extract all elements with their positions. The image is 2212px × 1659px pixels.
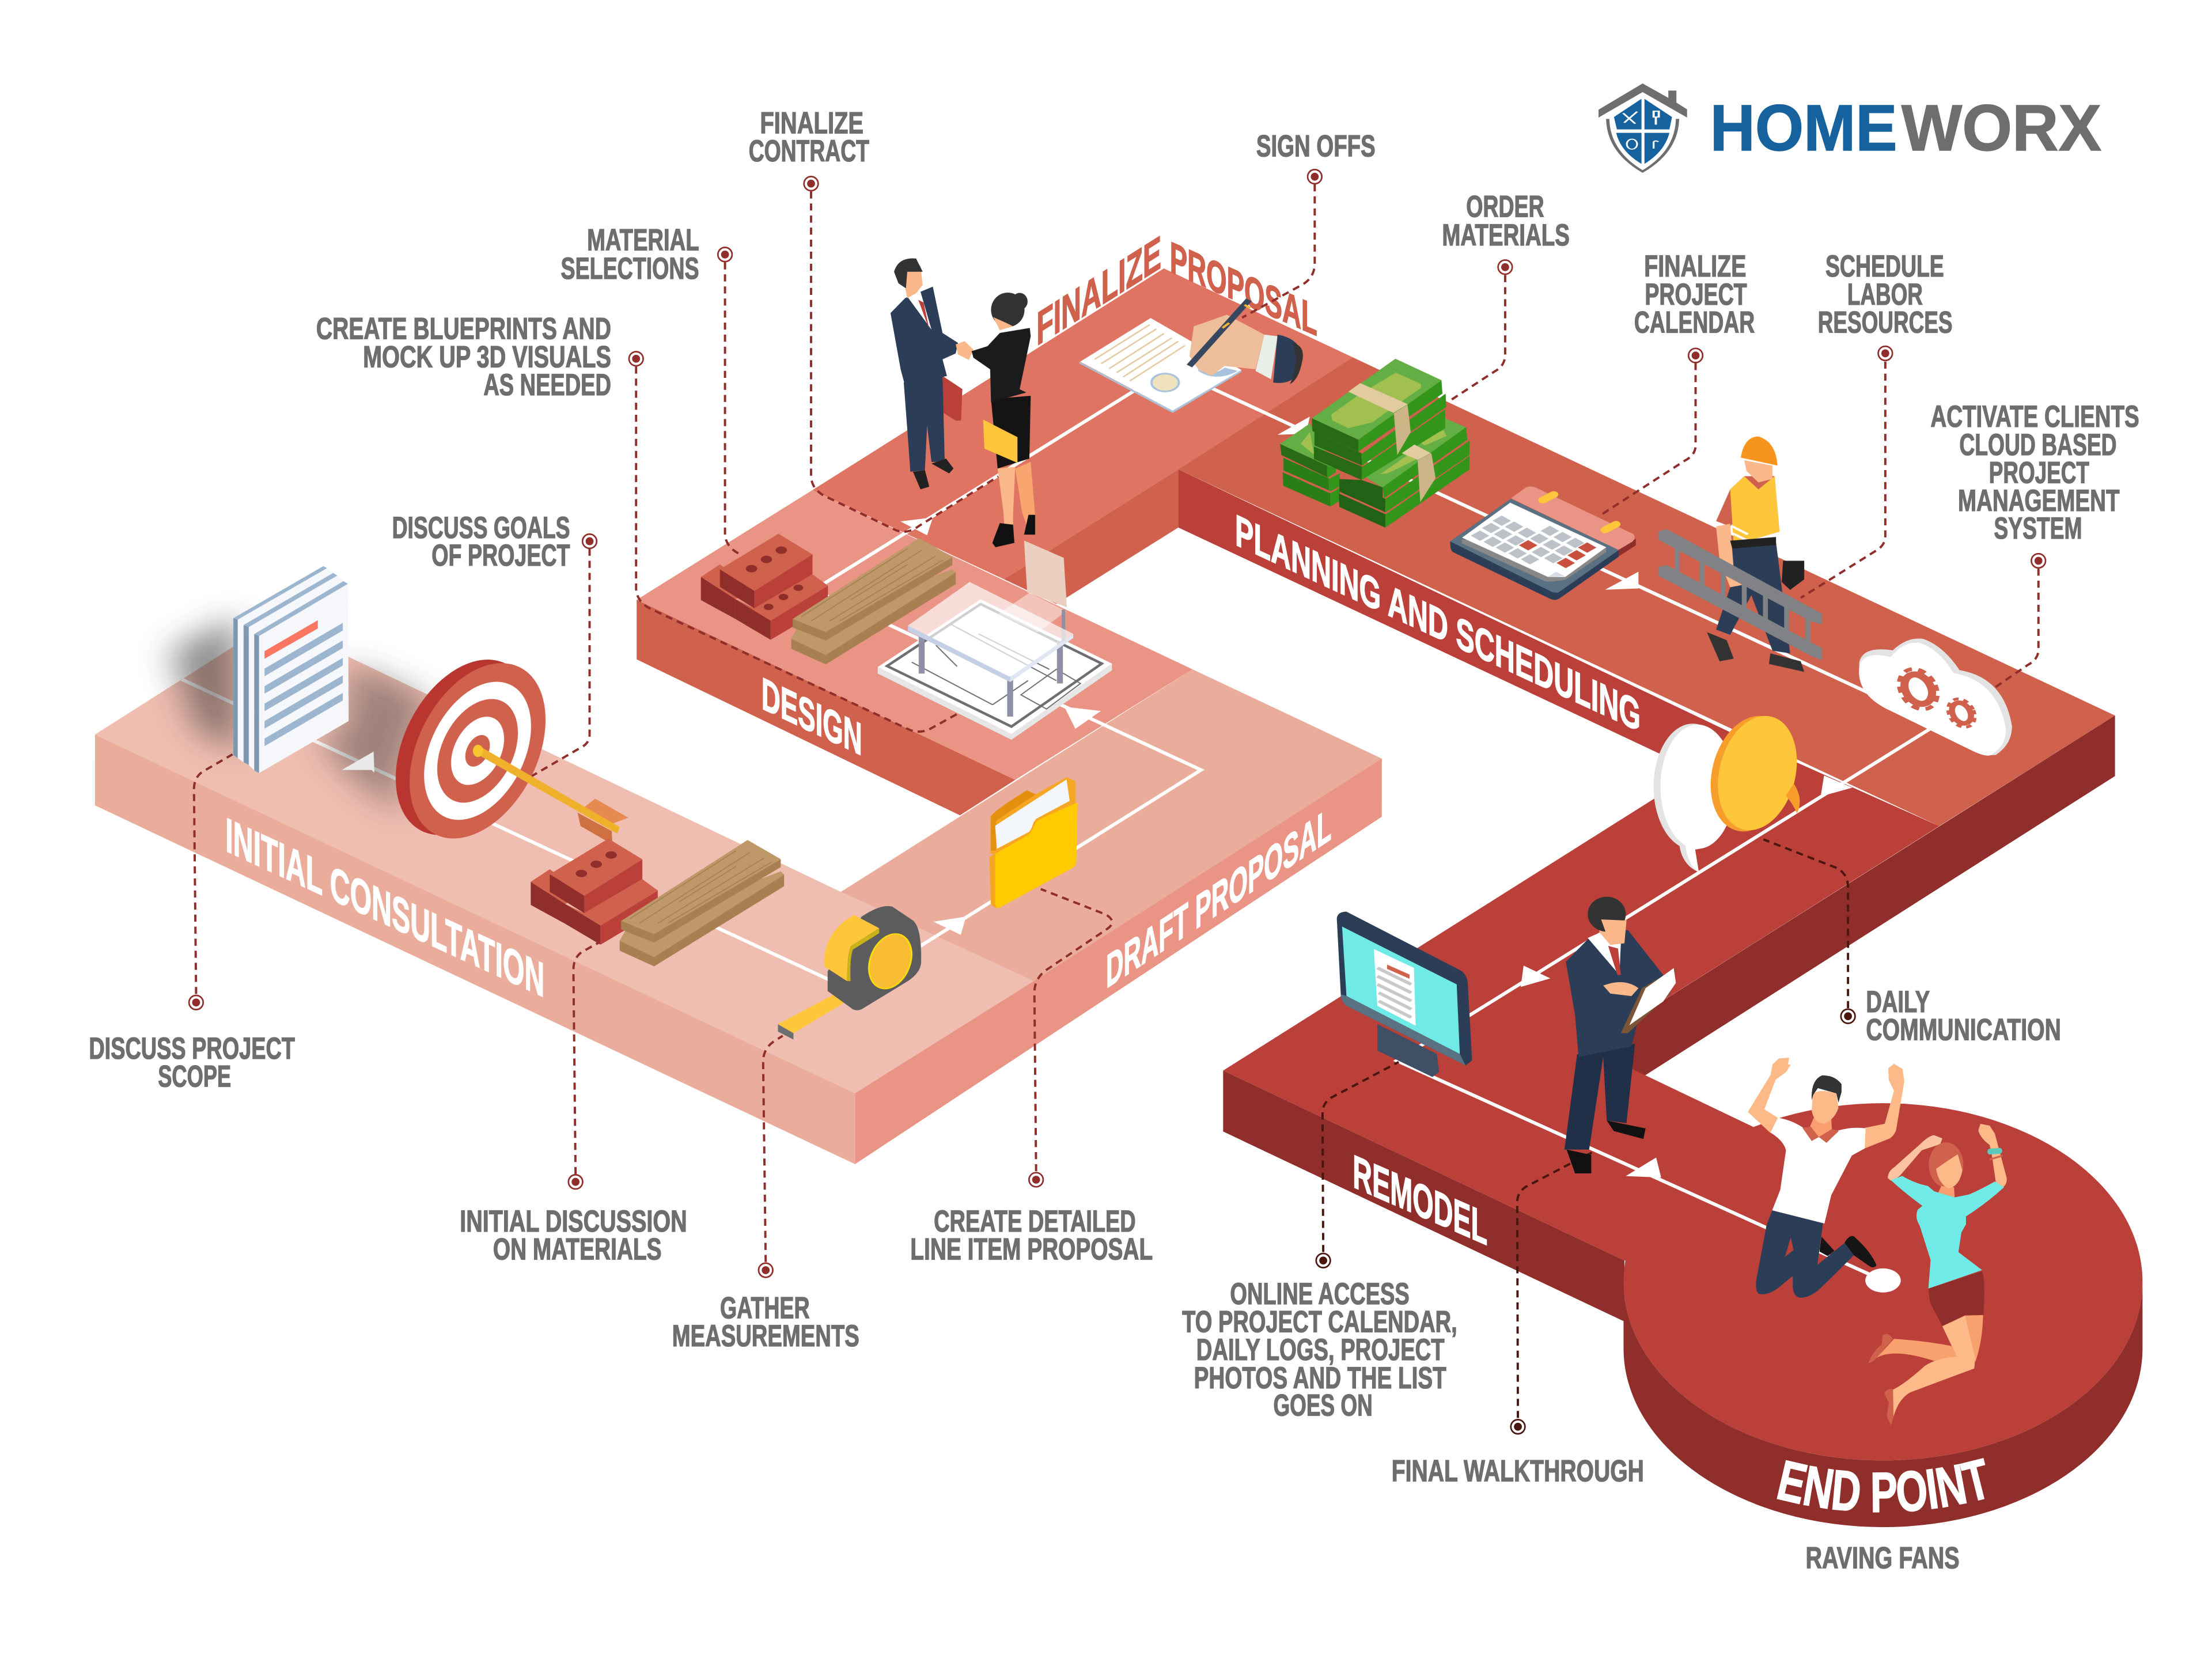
end point text guide [1758,1492,2008,1512]
logo wordmark: HOME [1710,91,1897,164]
icon: yellow folder [990,777,1078,908]
logo: homeworx [1599,84,2101,172]
callout: create detailed line item proposal: CREATE DETAILED [934,1205,1136,1238]
icon: wood planks (initial) [620,840,784,967]
icon: jumping woman [1868,1124,2007,1425]
callout: discuss goals of project: DISCUSS GOALS [392,511,570,545]
tape blade [778,994,846,1040]
callout: gather measurements: GATHER [720,1291,810,1325]
callout: sign offs: SIGN OFFS [1256,130,1376,164]
callout: activate clients cloud based system: SYSTEM [1994,512,2082,546]
callout: discuss project scope: DISCUSS PROJECT [89,1032,295,1066]
callout: online access: PHOTOS AND THE LIST [1194,1361,1446,1395]
heading: finalize proposal: PROPOSAL [1170,232,1317,346]
panel: end point disc base [1623,1282,2142,1527]
callout: discuss project scope [89,755,295,1093]
icon: signed contract with hand [1079,300,1303,413]
icon: business man shaking hands [891,259,974,489]
arrowhead: initial consultation [342,752,374,773]
callout: create detailed line item proposal [910,889,1153,1267]
heading: end point label: END POINT [1777,1458,1985,1513]
icon: monitor with document [1337,912,1472,1077]
heading: finalize proposal [1036,225,1317,356]
heading: initial consultation: INITIAL CONSULTATION [225,807,544,1008]
callout: daily communication: DAILY [1866,985,1930,1019]
callout: schedule labor resources: LABOR [1847,278,1923,312]
callout: gather measurements: MEASUREMENTS [672,1319,859,1353]
callout: initial discussion on materials: INITIAL DISCUSSION [460,1205,687,1238]
callout: finalize contract: CONTRACT [749,134,869,168]
callout: order materials: ORDER [1466,190,1544,224]
icon: document stack [233,566,349,773]
icon: tape measure [778,906,921,1040]
callout: finalize project calendar: FINALIZE [1644,249,1746,283]
callout: discuss goals of project: OF PROJECT [431,539,570,573]
callout: daily communication [1763,839,2061,1047]
callout: online access: ONLINE ACCESS [1230,1277,1410,1311]
icon: bricks (initial) [531,839,658,945]
icon: worker with ladder [1658,437,1822,672]
callout: final walkthrough [1392,1152,1644,1488]
callout: initial discussion on materials: ON MATERIALS [493,1233,662,1267]
panel: remodel slab [1223,740,1939,1321]
callout: finalize project calendar: PROJECT [1645,278,1747,312]
icon: cloud with gears [1859,639,2012,756]
callout: schedule labor resources: RESOURCES [1818,306,1953,340]
callout: activate clients cloud based system: CLOUD BASED [1959,428,2117,462]
callout: create blueprints: MOCK UP 3D VISUALS [363,340,611,374]
heading: draft proposal: DRAFT PROPOSAL [1106,797,1331,999]
icon: calendar [1450,487,1636,600]
callout: finalize project calendar: CALENDAR [1634,306,1755,340]
panel: design slab [637,490,1192,815]
callout: discuss goals of project [392,511,597,778]
heading: design: DESIGN [762,668,862,766]
callout: schedule labor resources: SCHEDULE [1825,249,1944,283]
callout: online access: GOES ON [1273,1389,1373,1423]
icon: money stacks [1280,359,1469,528]
callout: material selections [561,223,740,554]
icon: man with clipboard [1565,897,1676,1173]
callout: sign offs [1242,130,1376,317]
callout: online access: TO PROJECT CALENDAR, [1182,1305,1457,1339]
callout: finalize contract [749,106,998,532]
target arrow [473,745,628,844]
heading: remodel: REMODEL [1353,1145,1487,1256]
icon: jumping man [1748,1058,1904,1298]
callout: finalize contract: FINALIZE [760,106,863,140]
callout: order materials: MATERIALS [1442,218,1570,252]
panel: draft proposal slab [841,669,1382,1164]
icon: blueprint with glass table and chair [878,540,1112,740]
chair [998,540,1067,641]
callout: online access: DAILY LOGS, PROJECT [1196,1333,1445,1367]
path end marker [1865,1268,1901,1293]
icon: business woman shaking hands [972,293,1035,547]
panel: end point disc top [1623,1103,2142,1460]
callout: activate clients cloud based system: ACTIVATE CLIENTS [1930,400,2139,434]
icon: wood planks (design) [791,538,956,664]
icon: target with arrow [368,637,628,861]
left stack [1280,423,1340,506]
panel: initial consultation slab [95,621,1033,1164]
callout: online access [1182,1062,1457,1423]
callout: schedule labor resources [1801,249,1953,598]
glass table [908,582,1073,717]
top stack [1312,359,1446,480]
process path line [181,369,1937,1281]
callout: activate clients cloud based system [1930,400,2139,688]
callout: create blueprints [316,312,959,732]
callout: create blueprints: CREATE BLUEPRINTS AND [316,312,611,346]
icon: speech bubbles [1654,712,1806,872]
logo shield icon [1599,84,1687,172]
callout: material selections: SELECTIONS [561,252,699,286]
right stack [1339,418,1469,528]
callout: initial discussion on materials [460,942,687,1267]
callout: final walkthrough: FINAL WALKTHROUGH [1392,1455,1644,1488]
callout: activate clients cloud based system: MANAGEMENT [1958,484,2120,518]
heading: planning and scheduling: PLANNING AND SCHEDULING [1235,505,1641,742]
arrowheads along path [900,416,1853,1177]
callout: gather measurements [672,1036,859,1353]
heading: finalize proposal: FINALIZE [1036,225,1161,356]
money bands [1349,383,1435,502]
callout: create blueprints: AS NEEDED [483,368,611,402]
callout: finalize project calendar [1600,249,1755,516]
logo wordmark [1710,91,2101,164]
logo wordmark: WORX [1902,91,2101,164]
icon: bricks (design) [701,534,828,640]
ladder [1658,529,1822,660]
callout: activate clients cloud based system: PROJECT [1989,456,2089,490]
callout: daily communication: COMMUNICATION [1866,1013,2061,1047]
callout: order materials [1442,190,1570,402]
panel: planning and scheduling slab [1179,357,2115,1075]
tape body [824,906,921,1010]
callout: material selections: MATERIAL [587,223,699,257]
panel: finalize proposal slab [812,225,1353,604]
callout: discuss project scope: SCOPE [158,1059,231,1093]
shadow behind document and target [171,615,428,817]
callout: create detailed line item proposal: LINE ITEM PROPOSAL [910,1233,1153,1267]
callout: raving fans: RAVING FANS [1806,1541,1960,1575]
